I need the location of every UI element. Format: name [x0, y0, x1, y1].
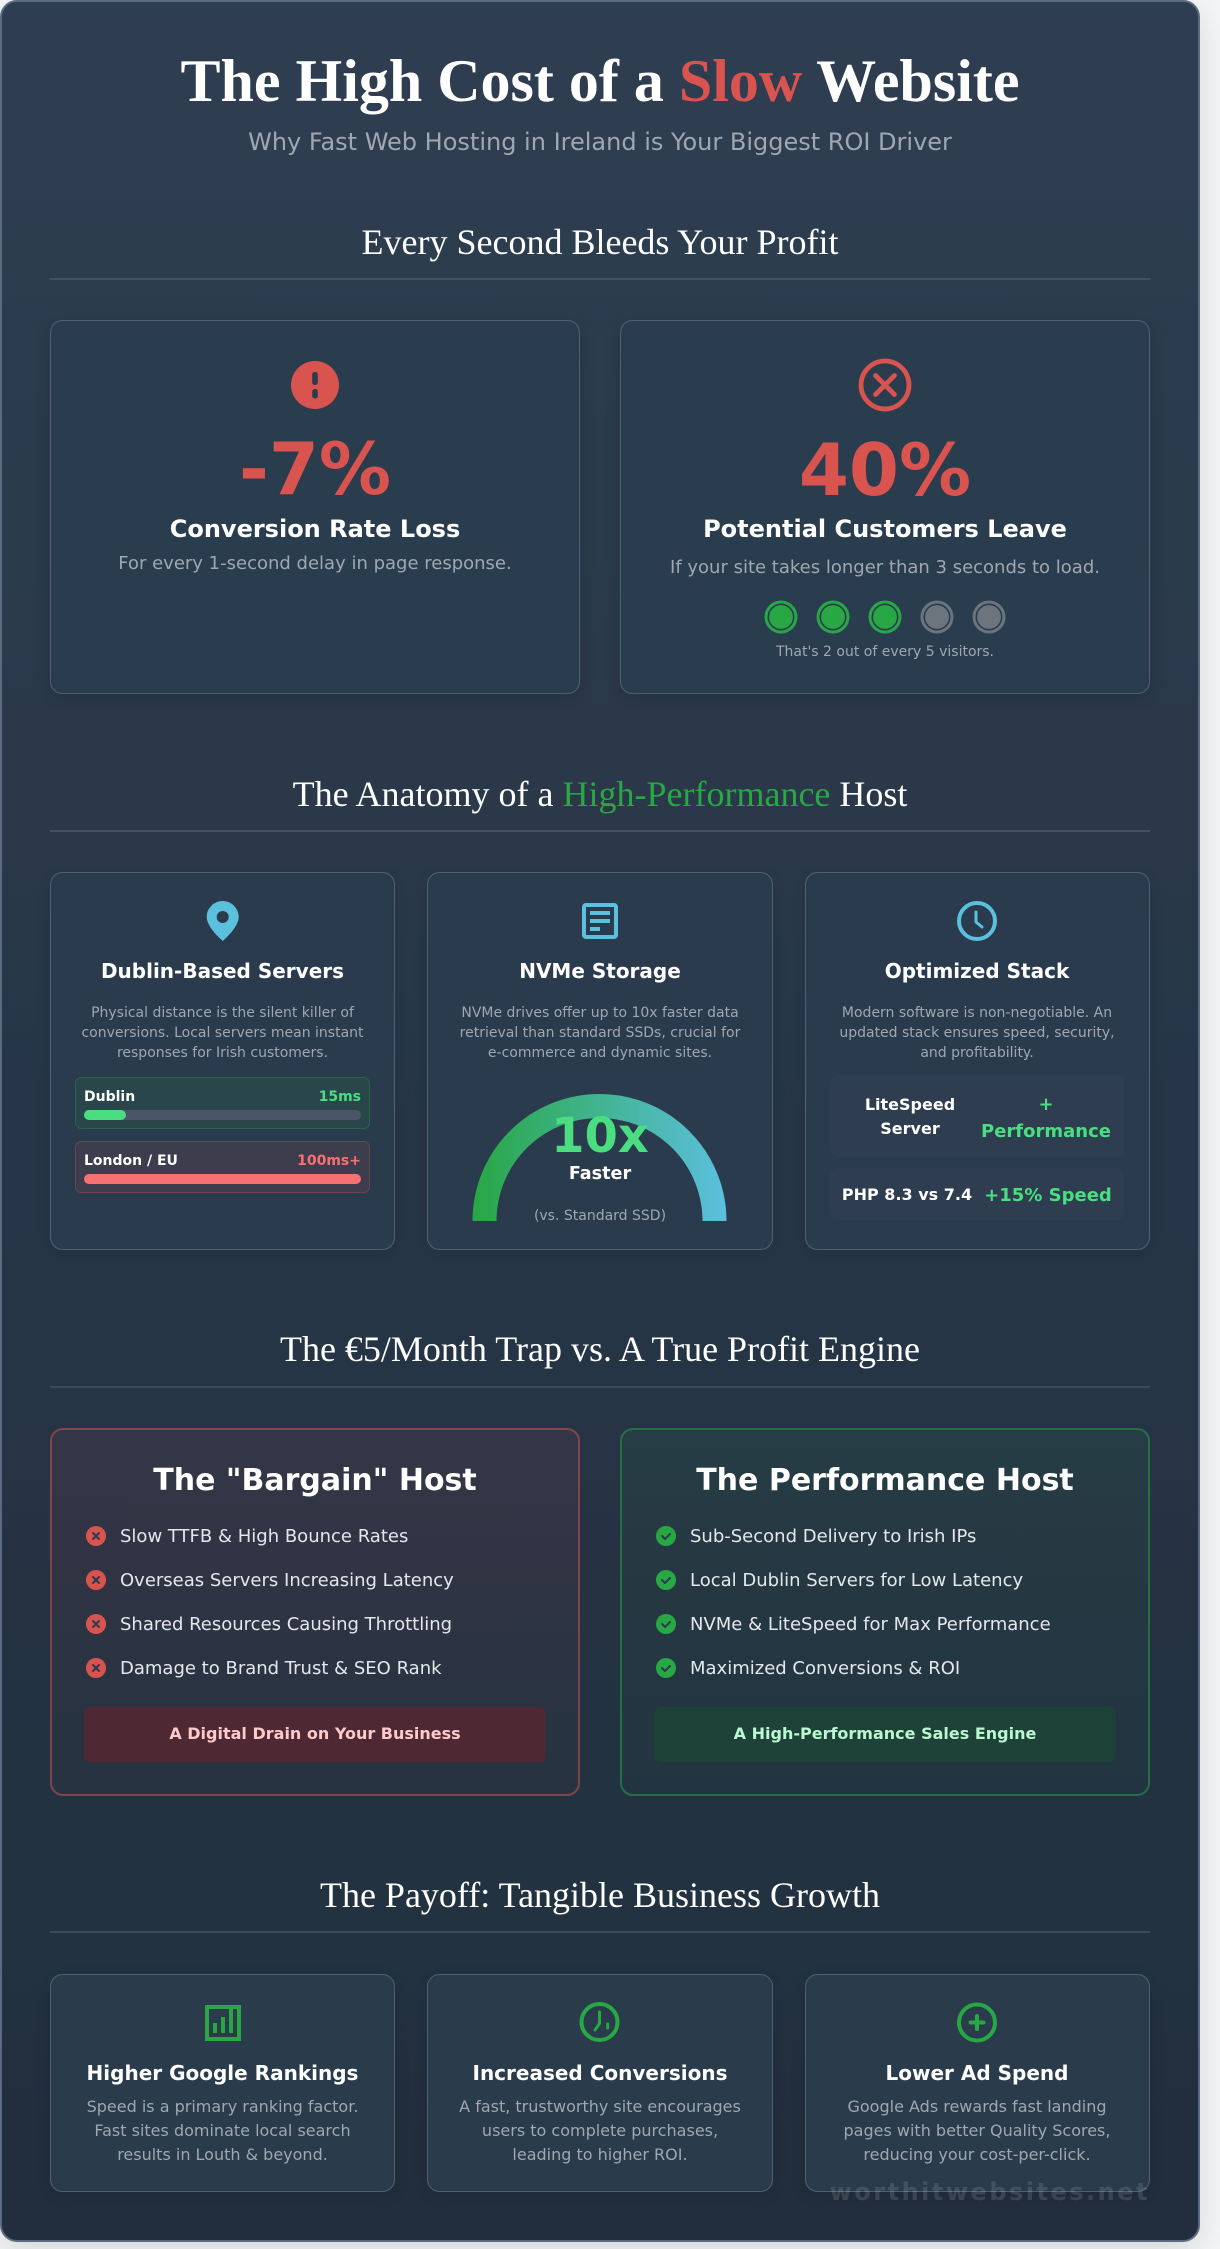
- description: Physical distance is the silent killer of: [91, 1005, 355, 1021]
- icon: x circle: [861, 361, 909, 409]
- good list: NVMe & LiteSpeed for Max Performance: [690, 1614, 1051, 1635]
- description: [81, 1005, 364, 1061]
- section heading: trap vs engine: The €5/Month Trap vs. A True Profit Engine: [280, 1329, 920, 1369]
- panel: conversion rate loss: [50, 320, 580, 694]
- description: [87, 2097, 358, 2164]
- icon: plus circle: [959, 2004, 995, 2040]
- icon: alert: [291, 361, 339, 409]
- icon: document: [584, 905, 616, 937]
- latency: dublin: [76, 1078, 370, 1128]
- panel: increased conversions: [428, 1974, 772, 2192]
- verdict: [654, 1707, 1116, 1762]
- description: [839, 1005, 1115, 1061]
- latency: london: London / EU: [84, 1153, 178, 1169]
- icon: pin: [207, 901, 239, 941]
- heading: The Performance Host: [696, 1463, 1074, 1498]
- heading: Increased Conversions: [473, 2061, 727, 2085]
- description: [459, 2097, 741, 2164]
- good list: Maximized Conversions & ROI: [690, 1658, 960, 1679]
- description: retrieval than standard SSDs, crucial for: [460, 1025, 741, 1041]
- description: and profitability.: [920, 1045, 1034, 1061]
- good list: Local Dublin Servers for Low Latency: [690, 1570, 1023, 1591]
- stat: 40%: 40%: [799, 428, 971, 512]
- description: users to complete purchases,: [482, 2121, 718, 2140]
- description: [844, 2097, 1110, 2164]
- description: [460, 1005, 741, 1061]
- latency: dublin: Dublin: [84, 1089, 135, 1105]
- latency: london: 100ms+: [297, 1153, 361, 1169]
- description: Google Ads rewards fast landing: [847, 2097, 1107, 2116]
- gauge: 10x faster: (vs. Standard SSD): [534, 1208, 666, 1224]
- description: leading to higher ROI.: [512, 2145, 688, 2164]
- verdict: A Digital Drain on Your Business: [169, 1724, 461, 1743]
- description: Speed is a primary ranking factor.: [87, 2097, 358, 2116]
- heading: Lower Ad Spend: [886, 2061, 1068, 2085]
- description: pages with better Quality Scores,: [844, 2121, 1110, 2140]
- stat description: If your site takes longer than 3 seconds to load.: [670, 557, 1100, 578]
- heading: The "Bargain" Host: [153, 1463, 477, 1498]
- verdict: [84, 1707, 546, 1762]
- bad list: [86, 1526, 454, 1679]
- latency: london: [76, 1142, 370, 1192]
- description: responses for Irish customers.: [117, 1045, 328, 1061]
- header: [180, 48, 1020, 156]
- gauge: 10x faster: 10x: [551, 1108, 649, 1164]
- latency: dublin: 15ms: [319, 1089, 361, 1105]
- stack row: litespeed: Performance: [981, 1121, 1111, 1142]
- description: e-commerce and dynamic sites.: [488, 1045, 712, 1061]
- stack row: php: [830, 1168, 1124, 1220]
- panel: customers leave: [620, 320, 1150, 694]
- panel: performance host: [621, 1429, 1149, 1795]
- panel: dublin servers: [50, 872, 394, 1250]
- icon: clock: [959, 903, 995, 939]
- panel: google rankings: [50, 1974, 394, 2192]
- bad list: Overseas Servers Increasing Latency: [120, 1570, 454, 1591]
- section heading: anatomy: The Anatomy of a High-Performance Host: [293, 774, 907, 814]
- heading: Dublin-Based Servers: [101, 959, 344, 983]
- stack row: litespeed: LiteSpeed: [865, 1095, 955, 1114]
- heading: Optimized Stack: [885, 959, 1070, 983]
- panel: bargain host: [51, 1429, 579, 1795]
- bad list: Damage to Brand Trust & SEO Rank: [120, 1658, 442, 1679]
- visitors caption: That's 2 out of every 5 visitors.: [775, 644, 994, 660]
- panel: lower ad spend: [806, 1974, 1150, 2192]
- stack row: litespeed: +: [1038, 1094, 1054, 1115]
- verdict: A High-Performance Sales Engine: [734, 1724, 1036, 1743]
- watermark: worthitwebsites.net: [830, 2178, 1150, 2206]
- description: conversions. Local servers mean instant: [81, 1025, 364, 1041]
- subtitle: Why Fast Web Hosting in Ireland is Your Biggest ROI Driver: [248, 128, 952, 156]
- stack row: litespeed: [830, 1075, 1124, 1157]
- stat description: For every 1-second delay in page response.: [118, 553, 512, 574]
- title: The High Cost of a Slow Website: [180, 48, 1020, 114]
- bad list: Slow TTFB & High Bounce Rates: [120, 1526, 408, 1547]
- heading: Higher Google Rankings: [87, 2061, 358, 2085]
- panel: optimized stack: [806, 872, 1150, 1250]
- gauge: 10x faster: [484, 1106, 714, 1224]
- stack row: litespeed: Server: [880, 1119, 940, 1138]
- description: A fast, trustworthy site encourages: [459, 2097, 741, 2116]
- heading: NVMe Storage: [519, 959, 681, 983]
- stat label: Potential Customers Leave: [703, 515, 1067, 543]
- good list: [656, 1526, 1051, 1679]
- description: NVMe drives offer up to 10x faster data: [461, 1005, 739, 1021]
- icon: growth clock: [582, 2004, 618, 2040]
- stack row: php: PHP 8.3 vs 7.4: [842, 1185, 972, 1204]
- stat: -7%: -7%: [239, 427, 391, 511]
- gauge: 10x faster: Faster: [569, 1164, 631, 1184]
- stack row: php: +15% Speed: [984, 1185, 1112, 1206]
- panel: nvme storage: [428, 872, 772, 1250]
- visitor dots: [764, 600, 1006, 634]
- icon: bar chart: [207, 2007, 239, 2039]
- section heading: payoff: The Payoff: Tangible Business Growth: [320, 1875, 880, 1915]
- stat label: Conversion Rate Loss: [170, 515, 460, 543]
- bad list: Shared Resources Causing Throttling: [120, 1614, 452, 1635]
- description: reducing your cost-per-click.: [863, 2145, 1091, 2164]
- description: results in Louth & beyond.: [117, 2145, 328, 2164]
- good list: Sub-Second Delivery to Irish IPs: [690, 1526, 976, 1547]
- description: Fast sites dominate local search: [94, 2121, 351, 2140]
- description: updated stack ensures speed, security,: [839, 1025, 1115, 1041]
- description: Modern software is non-negotiable. An: [842, 1005, 1112, 1021]
- section heading: every second: Every Second Bleeds Your Profit: [362, 222, 838, 262]
